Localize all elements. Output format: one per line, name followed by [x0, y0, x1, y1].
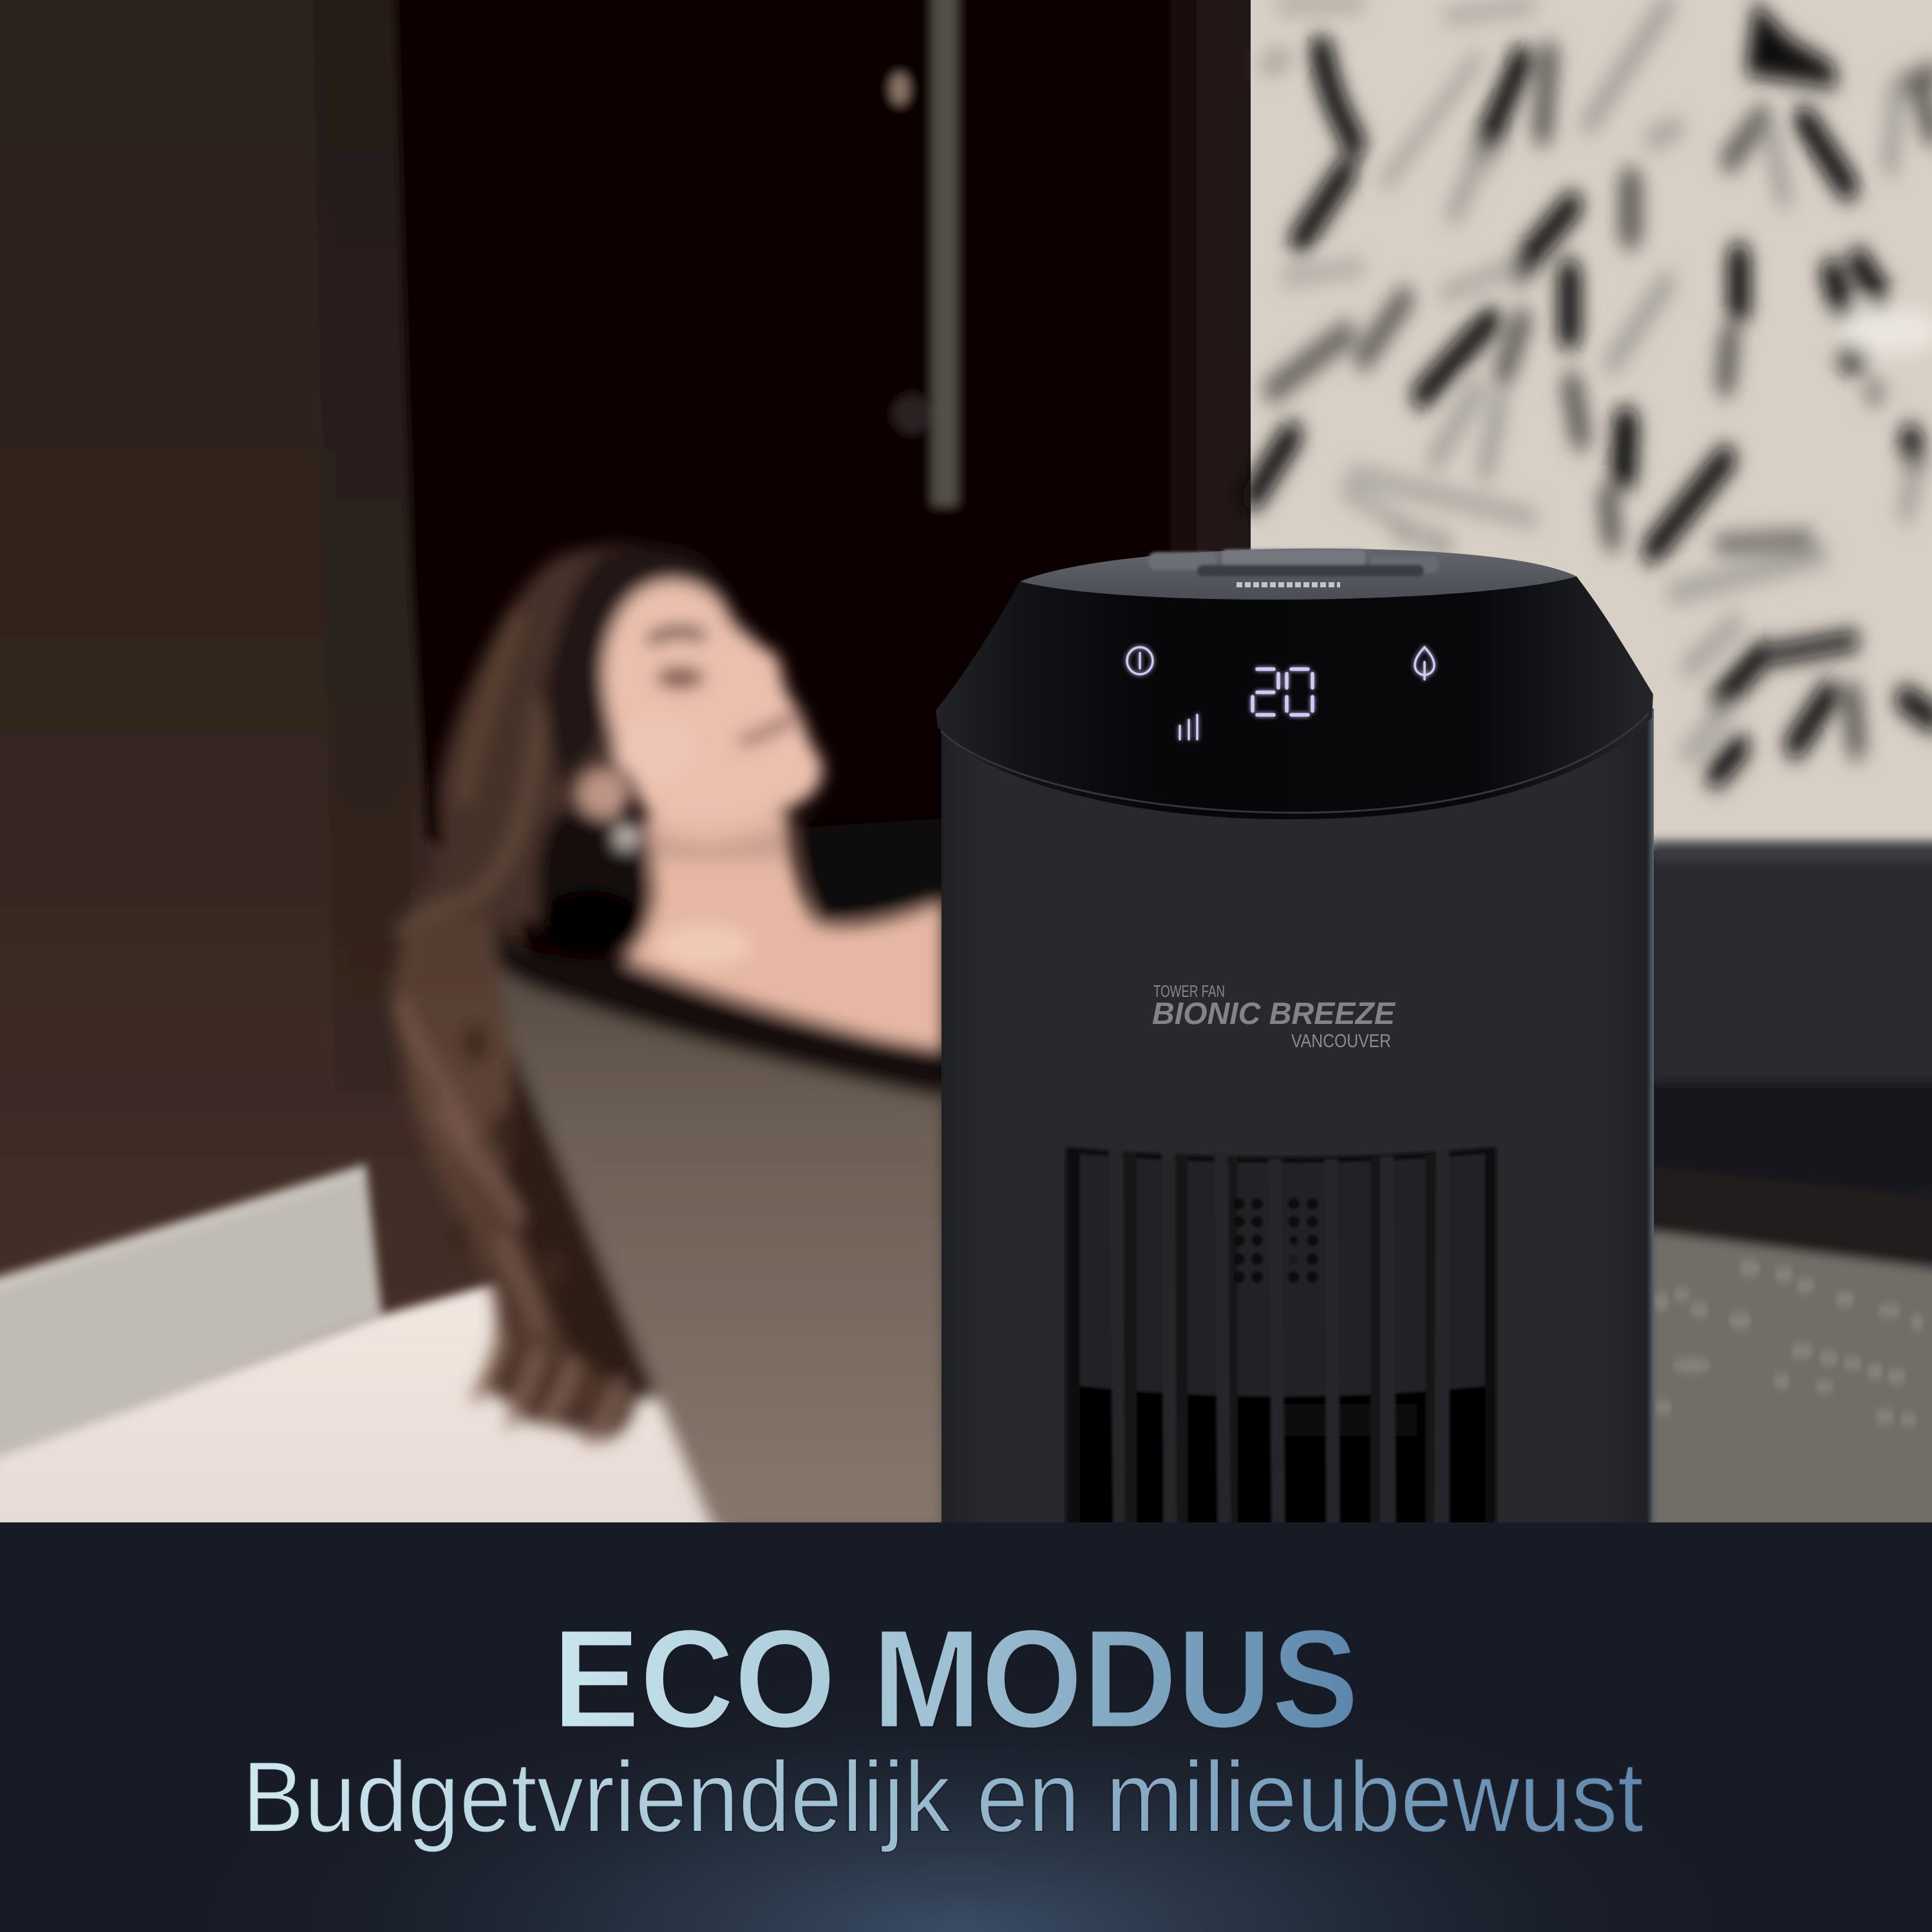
speaker perforation dots [1233, 1198, 1318, 1283]
neck and shoulder [623, 813, 945, 1053]
head, neck, shoulder and tub [401, 545, 948, 1533]
panel glow [155, 1662, 1765, 1932]
upper hair [408, 545, 756, 957]
dark hair behind neck [537, 810, 652, 957]
fan head [936, 576, 1653, 819]
product logo: TOWER FAN [1153, 981, 1225, 1001]
long hair falling over tub edge [392, 741, 663, 1440]
wallpaper with bamboo leaves [1251, 0, 1932, 850]
bench and floor at right [1649, 841, 1932, 1533]
skirting board and bright floor at left [0, 1164, 734, 1533]
fan top cap with control buttons [1020, 549, 1577, 600]
icon: power [1127, 647, 1153, 674]
icon: eco leaf [1415, 647, 1434, 679]
background: bathroom wall and doorway [0, 0, 1251, 1533]
bath tub rim [492, 898, 945, 1099]
fan body [942, 708, 1654, 1523]
title: ECO MODUS [553, 1601, 1359, 1757]
display icons and temperature [1127, 647, 1434, 739]
subtitle: Budgetvriendelijk en milieubewust [242, 1741, 1643, 1853]
woman relaxing in bath tub [392, 545, 948, 1533]
icon: signal bars [1180, 715, 1197, 739]
fan grille [1066, 1147, 1496, 1533]
tower fan [936, 549, 1654, 1533]
product logo: BIONIC BREEZE [1152, 997, 1396, 1031]
product logo: VANCOUVER [1291, 1031, 1391, 1052]
temperature digits 20 [1253, 669, 1312, 715]
product logo [1152, 981, 1396, 1052]
far tub rim [800, 819, 945, 925]
face [604, 582, 822, 825]
bottom caption panel [0, 1522, 1932, 1932]
bath tub shell [493, 946, 948, 1533]
